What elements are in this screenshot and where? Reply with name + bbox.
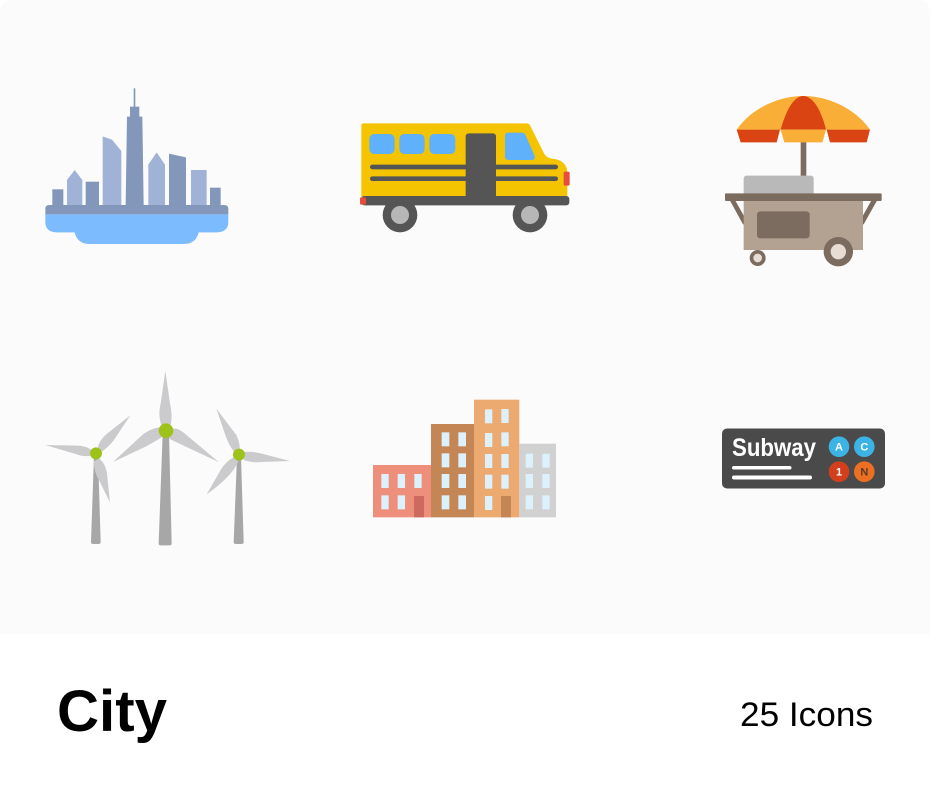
icon: street food cart with umbrella — [725, 96, 882, 266]
icon count: 25 Icons — [740, 696, 873, 734]
icon: subway sign: N — [860, 466, 868, 478]
icon: subway sign: Subway — [732, 434, 816, 462]
icon: apartment buildings — [373, 400, 556, 517]
icon: school bus — [360, 123, 570, 232]
icon: subway sign: A — [835, 442, 843, 454]
icon: subway sign: C — [860, 442, 868, 454]
title: City — [57, 679, 167, 744]
icon: three wind turbines — [45, 371, 290, 545]
icon: subway sign: 1 — [836, 466, 842, 478]
icon: subway sign — [722, 428, 885, 488]
icon: city skyline on water — [45, 88, 228, 244]
